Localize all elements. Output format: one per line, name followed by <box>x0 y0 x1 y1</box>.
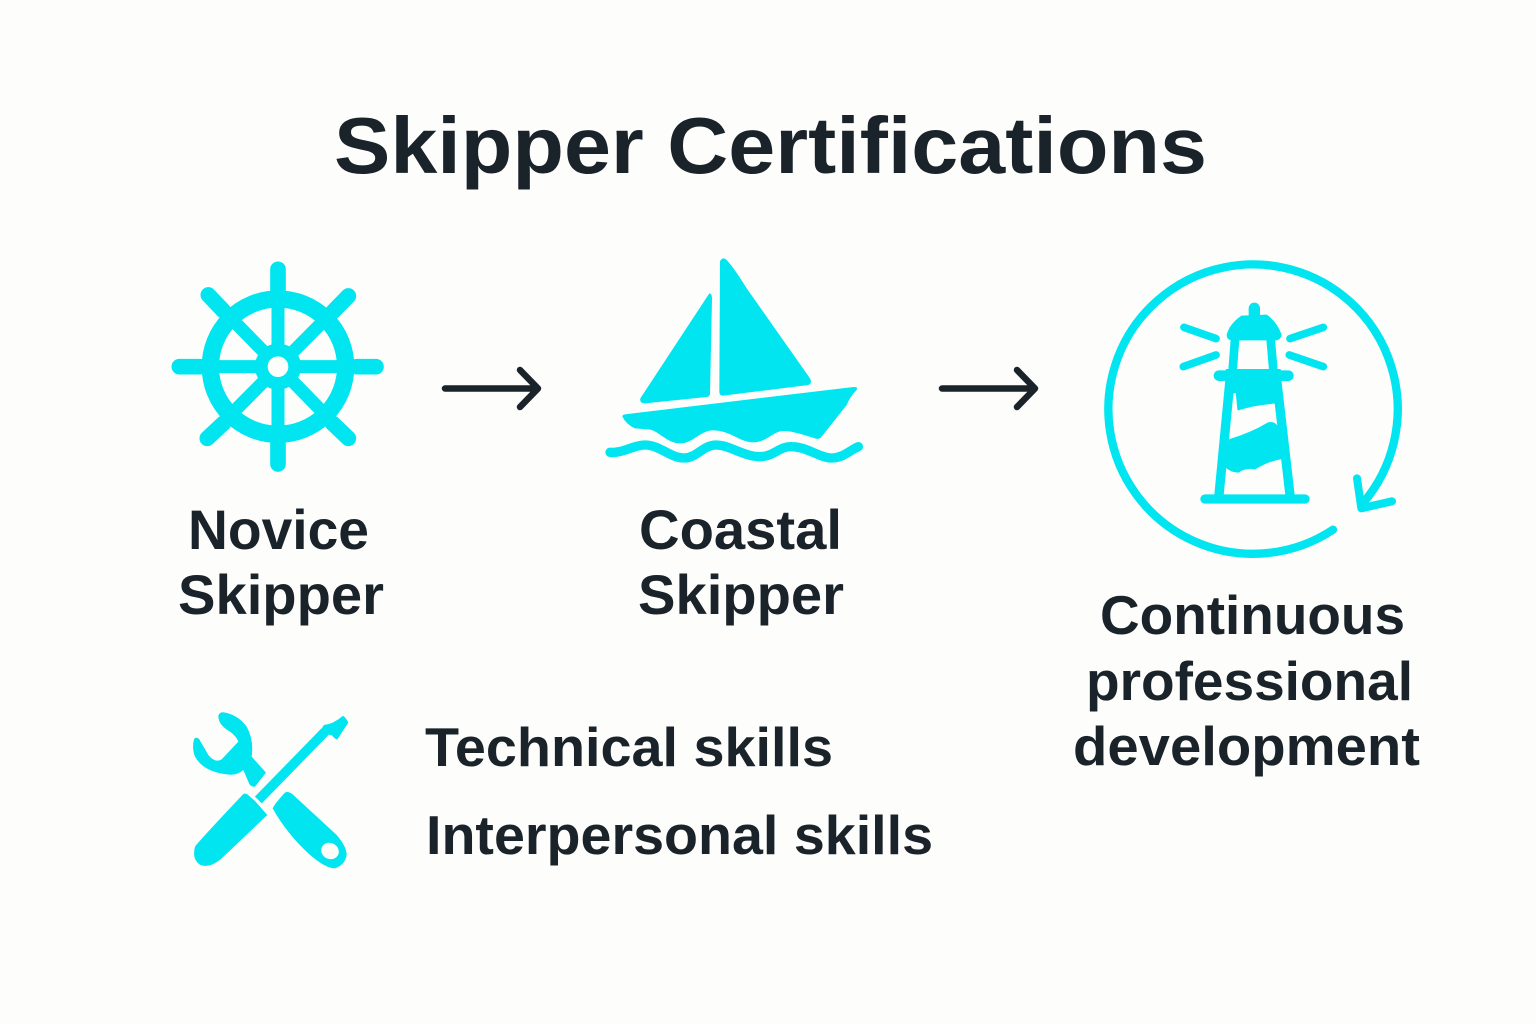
label: continuous professional development: professional <box>1086 650 1413 712</box>
icon: lighthouse <box>1183 308 1323 499</box>
panel: coastal skipper <box>610 258 858 626</box>
panel: novice skipper <box>178 269 384 626</box>
label: novice skipper: Novice <box>188 498 369 561</box>
icon: circular arrow <box>1108 264 1398 554</box>
label: continuous professional development: Continuous <box>1100 584 1405 646</box>
title: Skipper Certifications <box>334 101 1207 190</box>
label: coastal skipper <box>638 498 844 626</box>
panel: continuous professional development <box>1073 264 1420 777</box>
label: novice skipper <box>178 498 384 626</box>
icon: sailboat <box>610 258 858 458</box>
icon: ship wheel <box>179 269 376 464</box>
icon: crossed wrench and screwdriver <box>193 712 348 868</box>
label: novice skipper: Skipper <box>178 563 384 626</box>
arrow: novice to coastal <box>445 370 538 407</box>
panel: skills <box>193 712 933 868</box>
arrow: coastal to professional development <box>942 370 1035 407</box>
label: coastal skipper: Coastal <box>639 498 842 561</box>
label: continuous professional development <box>1073 584 1420 777</box>
label: coastal skipper: Skipper <box>638 563 844 626</box>
label: interpersonal skills: Interpersonal skills <box>426 804 933 866</box>
label: continuous professional development: development <box>1073 715 1420 777</box>
label: technical skills: Technical skills <box>425 716 833 778</box>
